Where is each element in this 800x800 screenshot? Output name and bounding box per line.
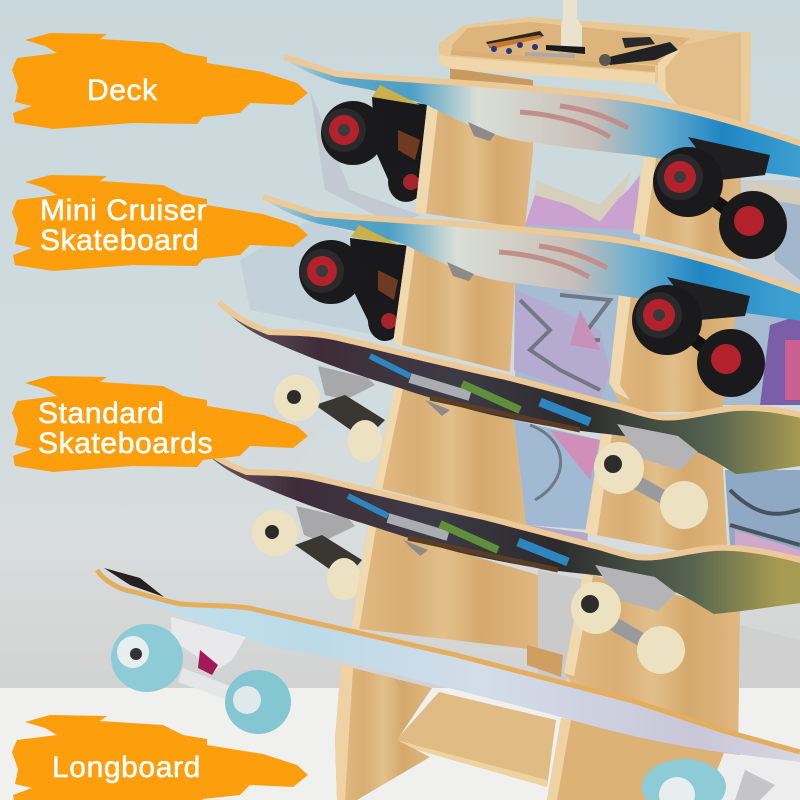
label text: Mini Cruiser Skateboard: Skateboard [40, 224, 199, 257]
board 2 wood edge [197, 442, 800, 562]
truck and wheels: longboard, left [111, 617, 291, 734]
truck and wheels: standard board 2, left [252, 506, 362, 600]
center column posts [351, 105, 538, 650]
bracket tip [468, 122, 495, 141]
right trucks and wheels [111, 137, 800, 800]
bracket tip [447, 262, 474, 281]
truck and wheels: deck board, right [653, 137, 787, 259]
brush stroke [12, 715, 308, 800]
truck and wheels: standard board 2, right [571, 565, 685, 674]
deck wood edge [284, 57, 800, 154]
truck and wheels: deck board, left [321, 97, 430, 202]
right column posts [564, 120, 741, 760]
skateboard: top deck board [284, 56, 800, 182]
longboard bracket tip [395, 680, 407, 692]
label text: Longboard: Longboard [52, 751, 201, 784]
bracket tip [403, 540, 428, 556]
label text: Standard Skateboards: Skateboards [38, 427, 213, 460]
wooden rack [335, 0, 751, 800]
label text: Mini Cruiser Skateboard: Mini Cruiser [40, 194, 207, 227]
skateboard: standard board 2 [197, 442, 800, 614]
skateboard: longboard [97, 568, 800, 762]
top shelf [439, 0, 751, 125]
left trucks and wheels (behind rack posts) [252, 97, 430, 600]
bracket tip [425, 400, 450, 416]
graffiti wall art [200, 90, 800, 688]
brush stroke [12, 376, 308, 472]
label: Deck [12, 33, 308, 129]
truck and wheel: longboard, right [642, 753, 800, 800]
graphic strokes [348, 496, 388, 516]
board 1 wood edge [219, 302, 800, 422]
brush stroke [12, 33, 308, 129]
shelf side plank [658, 32, 751, 125]
label text: Standard Skateboards: Standard [38, 397, 165, 430]
griptape tip [104, 568, 164, 597]
lower supports and crossbar [335, 645, 740, 800]
longboard wood edge [97, 570, 800, 752]
truck and wheels: standard board 1, right [594, 424, 708, 529]
floor [0, 688, 800, 800]
label: Mini Cruiser Skateboard [12, 175, 308, 271]
bottle on shelf [561, 0, 582, 48]
truck and wheels: standard board 1, left [274, 366, 385, 462]
skateboard: mini cruiser [263, 196, 800, 322]
truck and wheels: mini cruiser, right [632, 277, 765, 397]
truck and wheels: mini cruiser, left [299, 238, 410, 341]
label: Standard Skateboards [12, 376, 308, 472]
label: Longboard [12, 715, 308, 800]
brush stroke [12, 175, 308, 271]
mini cruiser wood edge [263, 197, 800, 294]
skateboard: standard board 1 [219, 302, 800, 474]
label text: Deck: Deck [87, 74, 158, 107]
mini fingerboards and tools on shelf [486, 31, 544, 48]
graphic strokes [370, 356, 410, 376]
